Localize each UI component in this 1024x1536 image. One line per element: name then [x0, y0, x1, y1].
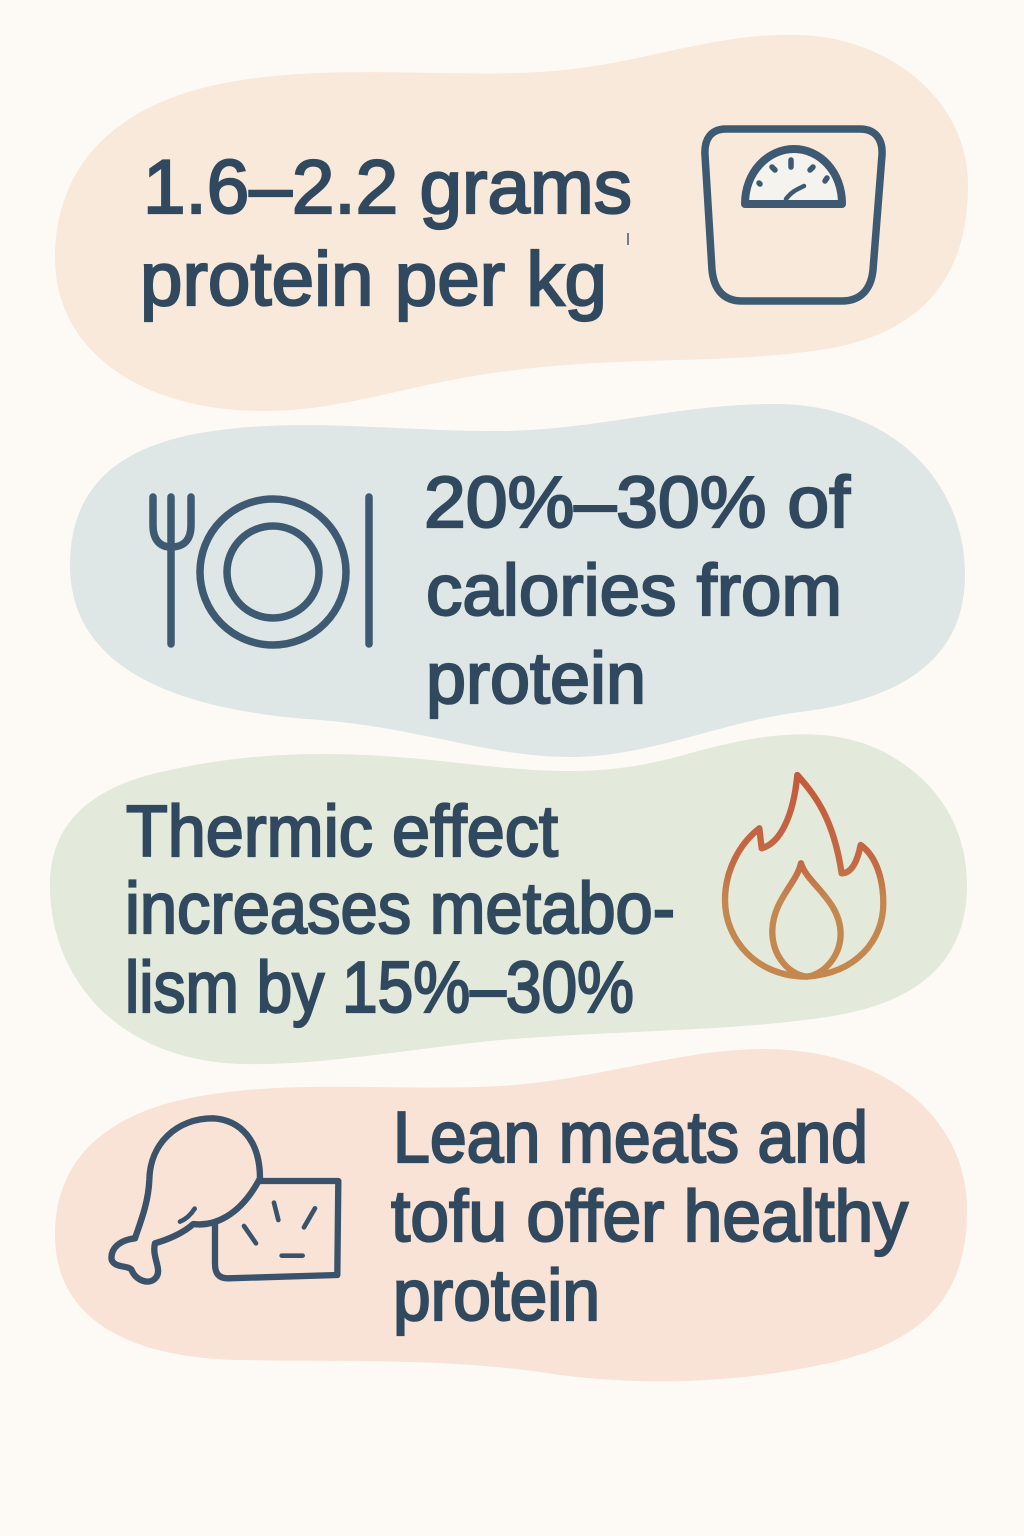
text: lean protein sources: Lean meats and — [393, 1098, 868, 1178]
panel background blob — [50, 734, 967, 1064]
panel: protein per kg — [55, 35, 968, 411]
heading: protein per kg: 1.6–2.2 grams — [143, 145, 632, 230]
text: thermic effect: increases metabo- — [125, 869, 675, 949]
icon: chicken drumstick and tofu — [111, 1118, 338, 1282]
text: thermic effect: Thermic effect — [126, 792, 558, 872]
panel: thermic effect — [50, 734, 967, 1064]
text: thermic effect: lism by 15%–30% — [125, 948, 634, 1028]
heading: protein per kg — [140, 145, 632, 322]
icon: plate and cutlery — [153, 497, 369, 645]
panel background blob — [55, 1049, 967, 1381]
text: lean protein sources: tofu offer healthy — [391, 1177, 908, 1257]
heading: protein per kg: protein per kg — [140, 237, 607, 322]
text: share of calories: calories from — [426, 551, 842, 631]
panel background blob — [55, 35, 968, 411]
text: share of calories: 20%–30% of — [424, 463, 851, 543]
text: share of calories: protein — [426, 639, 646, 719]
text: thermic effect — [125, 792, 675, 1028]
text: lean protein sources: protein — [393, 1256, 600, 1336]
icon: flame — [725, 775, 883, 977]
small stray tick mark — [627, 233, 629, 245]
text: lean protein sources — [391, 1098, 908, 1336]
panel: lean protein sources — [55, 1049, 967, 1381]
panel: share of calories — [70, 404, 965, 757]
icon: bathroom scale — [705, 129, 882, 301]
panel background blob — [70, 404, 965, 757]
text: share of calories — [424, 463, 851, 719]
